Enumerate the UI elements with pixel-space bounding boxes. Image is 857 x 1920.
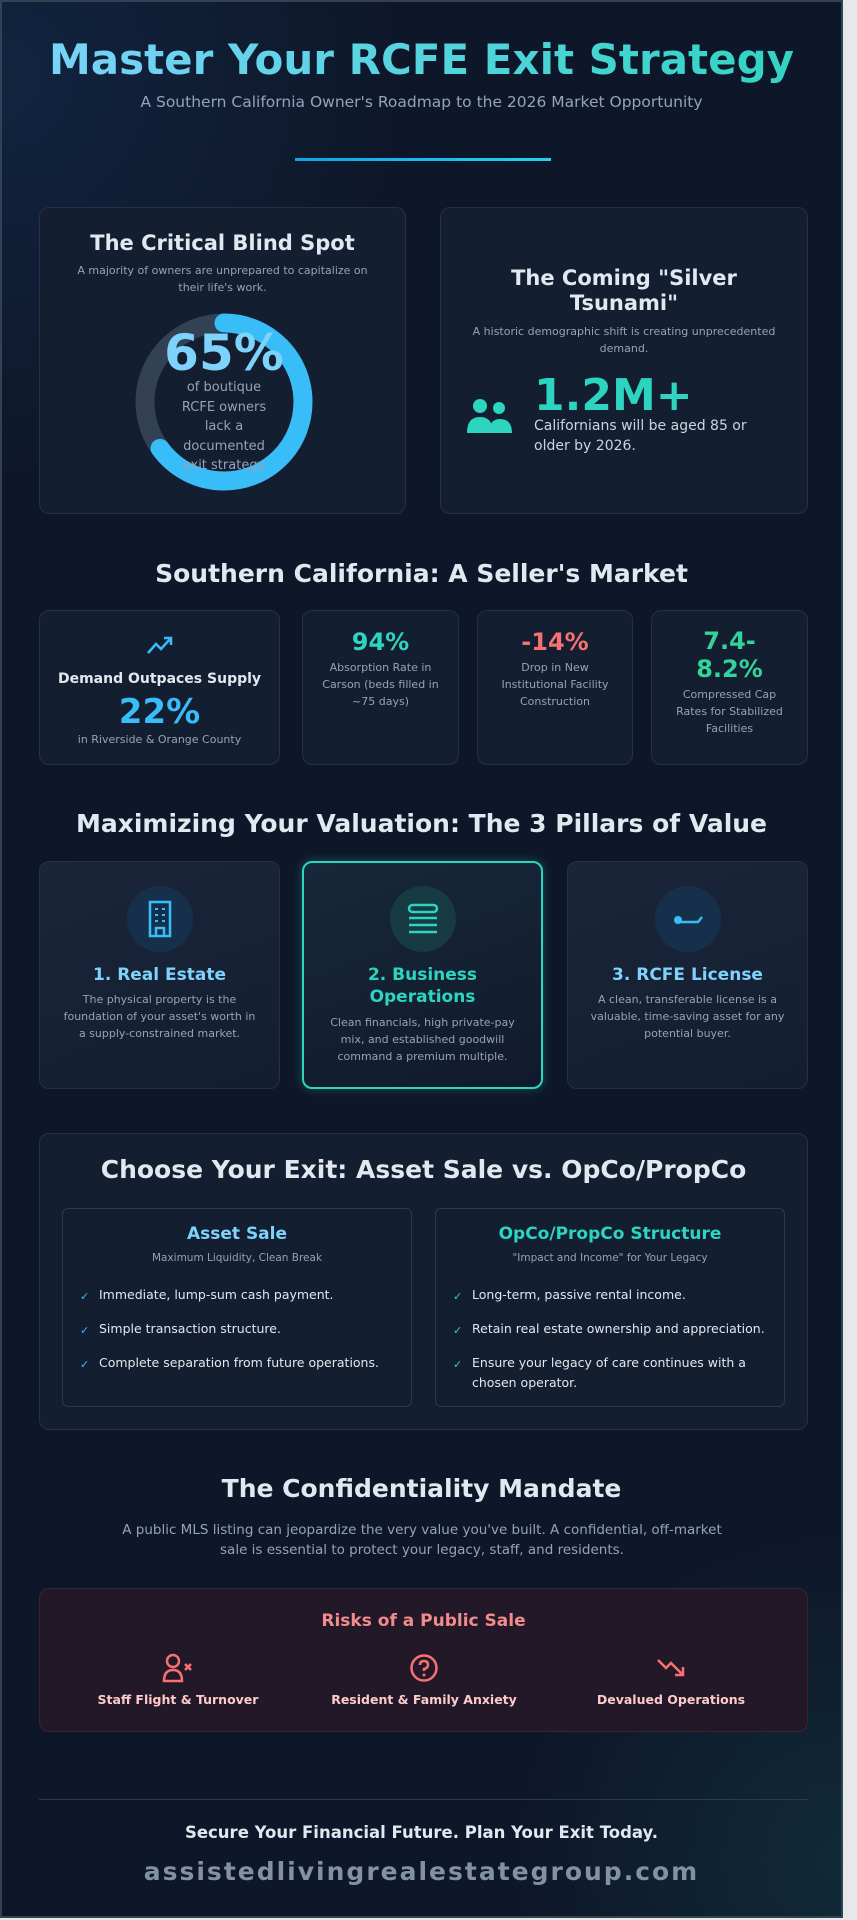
footer url: assistedlivingrealestategroup.com [144, 1857, 699, 1886]
box: asset sale: Simple transaction structure. [99, 1321, 281, 1336]
icon: key [655, 886, 721, 952]
stat card: cap rates [651, 610, 808, 765]
box: opco/propco: Ensure your legacy of care continues with a chosen operator. [472, 1355, 746, 1390]
pillar: business operations: 2. Business Operations [368, 965, 477, 1007]
box: asset sale: ✓ [80, 1290, 89, 1303]
panel: silver tsunami [440, 207, 808, 514]
heading: pillars: Maximizing Your Valuation: The 3 Pillars of Value [76, 809, 767, 838]
stat card: -14%: Drop in New Institutional Facility Construction [501, 661, 609, 708]
pillar: license: 3. RCFE License [612, 965, 763, 985]
icon: question [410, 1654, 438, 1682]
icon: stack [390, 886, 456, 952]
panel: risks: Staff Flight & Turnover [98, 1692, 258, 1707]
text: A majority of owners are unprepared to capitalize on their life's work. [77, 264, 368, 294]
pillar: business operations [302, 861, 543, 1089]
icon: trend up [147, 636, 172, 654]
box: asset sale: Immediate, lump-sum cash payment. [99, 1287, 334, 1302]
icon: staff [162, 1654, 192, 1682]
box: opco/propco: "Impact and Income" for Your Legacy [512, 1252, 708, 1264]
stat card: demand: Demand Outpaces Supply [58, 671, 261, 687]
pillar: real estate: 1. Real Estate [93, 965, 226, 985]
icon: building [127, 886, 193, 952]
stat card: cap rates: 7.4- [703, 627, 756, 655]
box: asset sale: ✓ [80, 1358, 89, 1371]
panel: silver tsunami: Californians will be aged 85 or older by 2026. [534, 418, 747, 454]
box: opco/propco: ✓ [453, 1358, 462, 1371]
footer tagline: Secure Your Financial Future. Plan Your Exit Today. [185, 1823, 658, 1842]
heading: confidentiality: The Confidentiality Mandate [222, 1474, 621, 1503]
box: opco/propco: Long-term, passive rental income. [472, 1287, 686, 1302]
panel: risks: Risks of a Public Sale [321, 1611, 526, 1631]
pillar: license: A clean, transferable license is a valuable, time-saving asset for any potential buyer. [591, 993, 784, 1040]
stat card: cap rates: 8.2% [696, 655, 763, 683]
panel: risks: Devalued Operations [597, 1692, 745, 1707]
stat card: 94%: Absorption Rate in Carson (beds filled in ~75 days) [322, 661, 439, 708]
stat card: -14% [477, 610, 633, 765]
text: confidentiality: A public MLS listing can jeopardize the very value you've built. A confidential, off-market sale is essential to protect your legacy, staff, and residents. [122, 1522, 722, 1558]
stat card: 94% [302, 610, 459, 765]
pillar: license [567, 861, 808, 1089]
box: asset sale: ✓ [80, 1324, 89, 1337]
stat card: 94%: 94% [352, 628, 409, 656]
panel: critical blind spot [39, 207, 406, 514]
box: opco/propco [435, 1208, 785, 1407]
box: asset sale: Maximum Liquidity, Clean Break [152, 1252, 322, 1264]
panel: critical blind spot: of boutique RCFE owners lack a documented exit strategy [182, 380, 266, 473]
pillar: real estate: The physical property is the foundation of your asset's worth in a supply-constrained market. [64, 993, 255, 1040]
pillar: real estate [39, 861, 280, 1089]
box: asset sale [62, 1208, 412, 1407]
stat 1.2M+: 1.2M+ [534, 370, 693, 421]
heading: Choose Your Exit: Asset Sale vs. OpCo/PropCo [101, 1155, 746, 1184]
heading: sellers market: Southern California: A Seller's Market [155, 559, 688, 588]
box: asset sale: Asset Sale [187, 1224, 287, 1244]
heading: The Coming "Silver Tsunami" [511, 266, 737, 315]
pillar: business operations: Clean financials, high private-pay mix, and established goodwill command a premium multiple. [330, 1016, 515, 1063]
title: Master Your RCFE Exit Strategy [49, 35, 794, 84]
stat 65%: 65% [164, 324, 284, 382]
stat card: demand [39, 610, 280, 765]
panel: risks: Resident & Family Anxiety [331, 1692, 517, 1707]
panel: choose your exit [39, 1133, 808, 1430]
stat card: demand: in Riverside & Orange County [78, 733, 241, 746]
subtitle: A Southern California Owner's Roadmap to the 2026 Market Opportunity [140, 93, 703, 111]
text: A historic demographic shift is creating unprecedented demand. [473, 325, 775, 355]
stat card: demand: 22% [119, 692, 200, 732]
box: opco/propco: Retain real estate ownership and appreciation. [472, 1321, 765, 1336]
box: opco/propco: OpCo/PropCo Structure [499, 1224, 721, 1244]
box: opco/propco: ✓ [453, 1324, 462, 1337]
donut chart [136, 314, 312, 490]
stat card: cap rates: Compressed Cap Rates for Stabilized Facilities [676, 688, 783, 735]
icon: trend down [657, 1659, 684, 1676]
panel: risks [39, 1588, 808, 1732]
box: opco/propco: ✓ [453, 1290, 462, 1303]
stat card: -14%: -14% [521, 628, 589, 656]
icon: people [467, 399, 512, 433]
box: asset sale: Complete separation from future operations. [99, 1355, 379, 1370]
heading: The Critical Blind Spot [90, 231, 355, 255]
